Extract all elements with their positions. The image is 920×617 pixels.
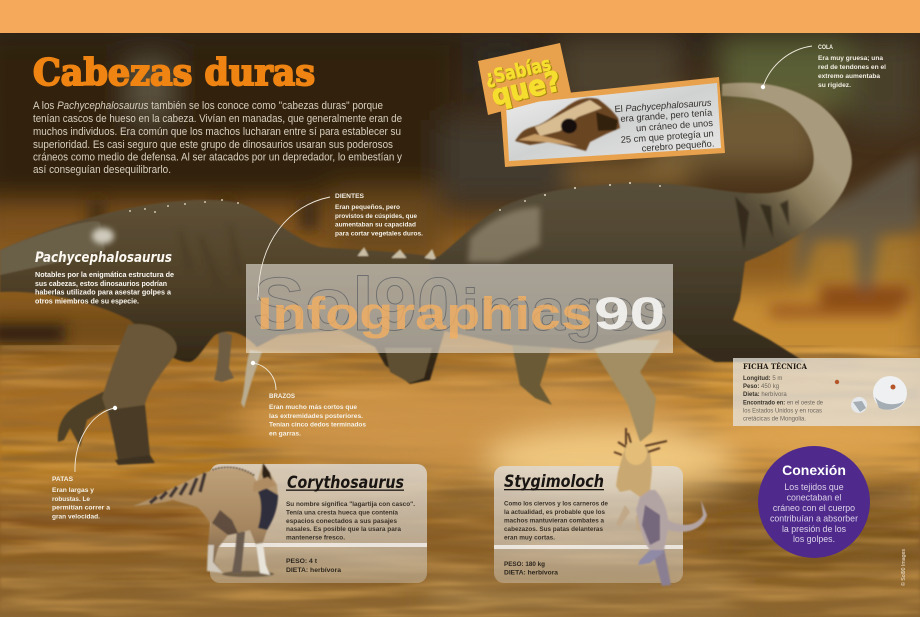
panel: Corythosaurus: Tenía una cresta hueca que contenía	[286, 510, 398, 516]
panel: ficha técnica: Dieta: herbívora	[743, 392, 787, 398]
panel: Corythosaurus: DIETA: herbívora	[286, 567, 341, 574]
panel: Corythosaurus	[210, 464, 427, 583]
panel: Stygimoloch: Como los ciervos y los carneros de	[504, 500, 608, 508]
callout: brazos: Eran mucho más cortos que	[269, 404, 357, 411]
callout: patas	[52, 406, 117, 520]
panel: Corythosaurus: Su nombre significa "lagartija con casco".	[286, 501, 415, 508]
badge: ¿Sabías que?: que?	[489, 65, 565, 113]
callout: patas: robustas. Le	[52, 496, 90, 503]
illustration: right Pachycephalosaurus	[430, 83, 852, 442]
callout: dientes: aumentaban su capacidad	[335, 222, 416, 228]
badge: ¿Sabías que?: ¿Sabías	[484, 54, 554, 90]
callout: dientes	[258, 193, 423, 300]
panel: did you know card: era grande, pero tenía	[620, 107, 713, 124]
intro paragraph: tenían cascos de hueso en la cabeza. Vivían en manadas, que generalmente eran de	[33, 113, 402, 125]
intro paragraph	[33, 100, 403, 176]
back speckles on dinosaurs	[129, 182, 661, 213]
panel: Stygimoloch	[494, 466, 683, 583]
panel: Corythosaurus: Corythosaurus	[287, 473, 404, 493]
badge: ¿Sabías que?: que?	[488, 64, 564, 112]
panel: ficha técnica: Longitud: 5 m	[743, 376, 782, 382]
panel: Stygimoloch: DIETA: herbívora	[504, 570, 558, 576]
illustration: left Pachycephalosaurus	[0, 200, 470, 465]
callout: brazos: las extremidades posteriores.	[269, 413, 363, 420]
callout: cola: COLA	[818, 44, 833, 51]
panel: Corythosaurus: mantenerse fresco.	[286, 534, 345, 542]
panel: Stygimoloch: machos mantuvieran combates a	[504, 518, 604, 524]
panel: Corythosaurus: PESO: 4 t	[286, 558, 318, 565]
map: locator globes	[835, 376, 907, 413]
intro paragraph: cráneos como medio de defensa. Al ser atacados por un depredador, lo embestían y	[33, 152, 403, 164]
panel: Conexión circle: Conexión	[782, 462, 846, 478]
panel: Corythosaurus: nasales. Es posible que la usara para	[286, 526, 401, 533]
badge: ¿Sabías que?: ¿Sabías	[483, 53, 553, 89]
callout: brazos: en garras.	[269, 430, 301, 438]
callout: brazos	[251, 361, 366, 438]
watermark plate: 90	[594, 288, 665, 339]
callout: cola: Era muy gruesa; una	[818, 55, 883, 62]
panel: ficha técnica: cretácicas de Mongolia.	[743, 416, 806, 422]
credit: © Sol90 Images	[900, 549, 907, 586]
panel: did you know card: un cráneo de unos	[636, 118, 714, 133]
callout: patas: Eran largas y	[52, 487, 94, 494]
intro paragraph: muchos individuos. Era común que los machos lucharan entre sí para establecer su	[33, 126, 401, 138]
panel: Stygimoloch: eran muy cortas.	[504, 534, 555, 542]
callout: patas: permitían correr a	[52, 504, 110, 512]
watermark plate: Sol90	[253, 262, 460, 346]
panel: ficha técnica: FICHA TÉCNICA	[743, 362, 807, 371]
panel: Stygimoloch: PESO: 180 kg	[504, 561, 545, 568]
species label: Pachycephalosaurus: Pachycephalosaurus	[35, 250, 172, 266]
species label: Pachycephalosaurus: sus cabezas, estos dinosaurios podrían	[35, 281, 167, 288]
callout: cola: extremo aumentaba	[818, 73, 880, 80]
panel: Conexión circle: Los tejidos que	[784, 482, 844, 492]
panel: Conexión circle	[758, 446, 870, 558]
callout: dientes: provistos de cúspides, que	[335, 213, 417, 220]
top orange band	[0, 0, 920, 34]
watermark plate: images	[462, 278, 668, 343]
panel: Stygimoloch: Stygimoloch	[504, 472, 604, 492]
intro paragraph: A los Pachycephalosaurus también se los conoce como "cabezas duras" porque	[33, 100, 383, 112]
illustration: Corythosaurus	[133, 463, 278, 577]
callout: dientes: Eran pequeños, pero	[335, 204, 400, 211]
badge: ¿Sabías que?	[478, 43, 571, 115]
watermark plate: Infographics	[257, 288, 592, 339]
callout: patas: gran velocidad.	[52, 514, 100, 520]
illustration: Stygimoloch	[614, 428, 707, 586]
panel: did you know card	[500, 77, 725, 167]
icon: skull	[515, 98, 620, 151]
species label: Pachycephalosaurus	[35, 250, 174, 306]
panel: ficha técnica: Encontrado en: en el oeste de	[743, 400, 824, 406]
panel: did you know card: 25 cm que protegía un	[620, 128, 714, 145]
callout: cola: red de tendones en el	[818, 64, 886, 71]
panel: Corythosaurus: espacios conectados a sus pasajes	[286, 518, 397, 525]
panel: did you know card: cerebro pequeño.	[641, 138, 715, 153]
panel: Conexión circle: los golpes.	[793, 534, 835, 544]
intro paragraph: superioridad. Es casi seguro que este grupo de dinosaurios usaran sus poderosos	[33, 139, 393, 151]
watermark plate	[246, 262, 673, 353]
callout: brazos: Tenían cinco dedos terminados	[269, 422, 366, 428]
callout: patas: PATAS	[52, 476, 74, 483]
panel: Conexión circle: cráneo con el cuerpo	[773, 503, 855, 513]
panel: ficha técnica: Peso: 450 kg	[743, 384, 779, 390]
panel: Stygimoloch: cabezazos. Sus patas delanteras	[504, 526, 603, 533]
callout: dientes: para cortar vegetales duros.	[335, 230, 423, 238]
species label: Pachycephalosaurus: Notables por la enigmática estructura de	[35, 272, 174, 279]
callout: cola: su rigidez.	[818, 82, 851, 89]
callout: cola	[761, 44, 886, 89]
panel: ficha técnica: los Estados Unidos y en rocas	[743, 408, 822, 414]
panel: Conexión circle: la presión de los	[782, 524, 847, 534]
panel: did you know card: El Pachycephalosaurus	[614, 98, 712, 114]
intro paragraph: así conseguían desequilibrarlo.	[33, 164, 171, 176]
panel: Conexión circle: contribuían a absorber	[770, 514, 858, 524]
species label: Pachycephalosaurus: otros miembros de su especie.	[35, 298, 139, 306]
panel: ficha técnica	[733, 358, 920, 426]
callout: brazos: BRAZOS	[269, 393, 296, 400]
title: Cabezas duras	[33, 52, 315, 94]
callout: dientes: DIENTES	[335, 193, 365, 200]
panel: Stygimoloch: la actualidad, es probable que los	[504, 509, 605, 516]
panel: Conexión circle: conectaban el	[787, 492, 841, 502]
species label: Pachycephalosaurus: haberlas utilizado para asestar golpes a	[35, 290, 171, 296]
